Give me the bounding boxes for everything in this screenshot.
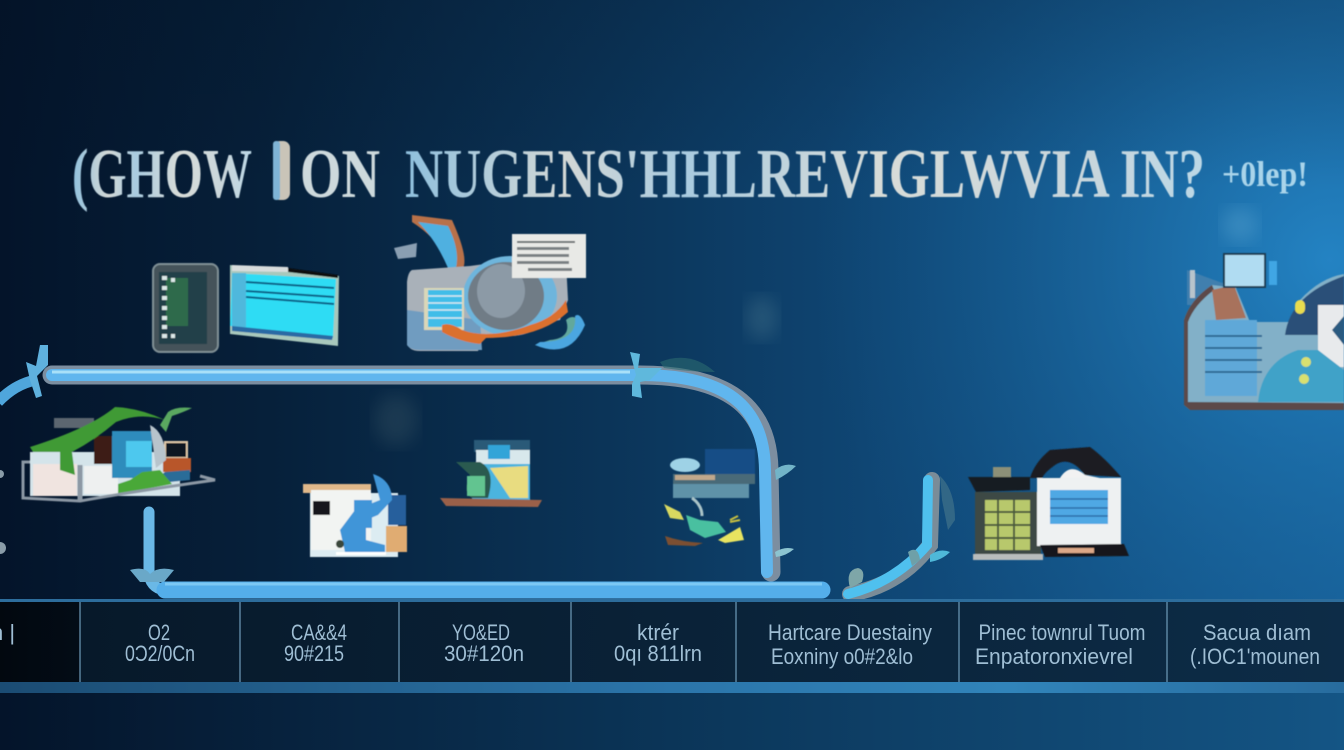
table text: Hartcare Duestainy xyxy=(768,620,932,645)
table text: 0Ͻ2/0Cn xyxy=(125,641,195,666)
icon: building with blue panel xyxy=(968,447,1129,560)
panel: timeline table xyxy=(0,599,1344,750)
table text: 30#120n xyxy=(444,641,524,666)
icon: right cluster xyxy=(1184,254,1344,410)
arrow: curved right pipe xyxy=(848,476,955,594)
table text: Pinec townrul Tuom xyxy=(978,620,1146,645)
title: ON xyxy=(300,136,380,213)
icon: small building on shelf xyxy=(440,440,542,507)
table text: 90#215 xyxy=(284,641,344,666)
icon: house with plant xyxy=(23,407,215,501)
table text: CA&&4 xyxy=(291,620,347,645)
title: (GHOW xyxy=(72,136,252,213)
small side marks xyxy=(0,470,6,554)
lower band xyxy=(0,682,1344,693)
arrow: upper pipe xyxy=(0,345,796,572)
title: +0lep! xyxy=(1222,154,1308,194)
table text: O2 xyxy=(148,620,170,645)
table text: Sacua dıam xyxy=(1203,620,1311,645)
table text: Enpatoronxievrel xyxy=(975,644,1133,669)
table text: Eoxniny o0#2&lo xyxy=(771,644,913,669)
icon: camera device xyxy=(394,215,586,351)
table text: ktrér xyxy=(637,620,679,645)
table text xyxy=(0,620,1320,669)
icon: shelf with bird xyxy=(664,449,755,546)
icon: desk and chair xyxy=(303,474,407,557)
table text: YO&ED xyxy=(452,620,510,645)
table text: 0qı 811lrn xyxy=(614,641,702,666)
icon: tablet and window xyxy=(153,264,339,352)
arrow: lower pipe xyxy=(130,512,822,590)
table text: (.IOC1'mounen xyxy=(1190,644,1320,669)
